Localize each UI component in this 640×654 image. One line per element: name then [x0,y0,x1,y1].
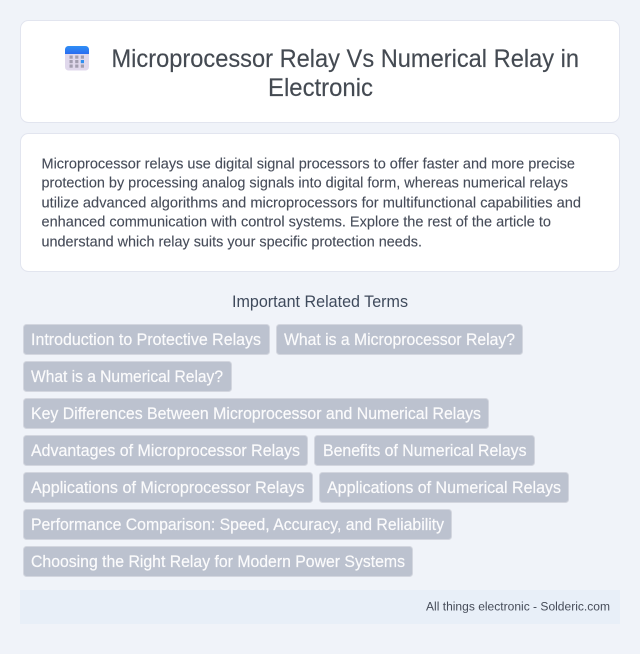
title [112,45,579,102]
tag: performance comparison: Performance Comparison: Speed, Accuracy, and Reliability [31,515,445,534]
tag: applications of microprocessor relays: Applications of Microprocessor Relays [31,478,304,497]
tag: benefits of numerical relays: Benefits of Numerical Relays [323,441,526,460]
text block: introduction paragraph: protection by processing analog signals into digital form, whereas numerical relays [42,176,568,192]
tag: advantages of microprocessor relays: Advantages of Microprocessor Relays [31,441,300,460]
text block: introduction paragraph: understand which relay suits your specific protection needs. [42,234,422,250]
tag: what is a numerical relay: What is a Numerical Relay? [31,367,223,386]
tag: benefits of numerical relays [314,436,534,466]
tag: applications of numerical relays [320,472,568,502]
tag: what is a numerical relay [24,362,232,392]
text block: introduction paragraph [42,156,581,250]
tag: key differences: Key Differences Between Microprocessor and Numerical Relays [31,404,481,423]
text block: introduction paragraph: utilize advanced algorithms and microprocessors for multifunctional capabilities and [42,195,581,211]
panel: introduction [20,134,620,272]
heading: important related terms: Important Related Terms [232,292,408,311]
tag: advantages of microprocessor relays [24,436,308,466]
tag: what is a microprocessor relay [276,324,522,354]
tag: introduction to protective relays [24,324,270,354]
tag: introduction to protective relays: Introduction to Protective Relays [31,330,261,349]
title: Microprocessor Relay Vs Numerical Relay in [112,45,579,73]
tag: key differences [24,398,488,428]
text block: introduction paragraph: Microprocessor relays use digital signal processors to offer faster and more precise [42,156,575,172]
tag: applications of numerical relays: Applications of Numerical Relays [327,478,561,497]
tag: what is a microprocessor relay: What is a Microprocessor Relay? [284,330,515,349]
title: Electronic [268,74,373,102]
text block: introduction paragraph: enhanced communication with control systems. Explore the rest of the article to [42,215,551,231]
tag: performance comparison [24,510,452,540]
tag: choosing the right relay [24,546,412,576]
footer credit: All things electronic - Solderic.com [426,600,610,614]
icon: calendar grid [65,46,89,70]
tag: choosing the right relay: Choosing the Right Relay for Modern Power Systems [31,552,405,571]
panel: title card [20,20,620,122]
tag: applications of microprocessor relays [24,472,312,502]
footer bar [20,590,620,624]
